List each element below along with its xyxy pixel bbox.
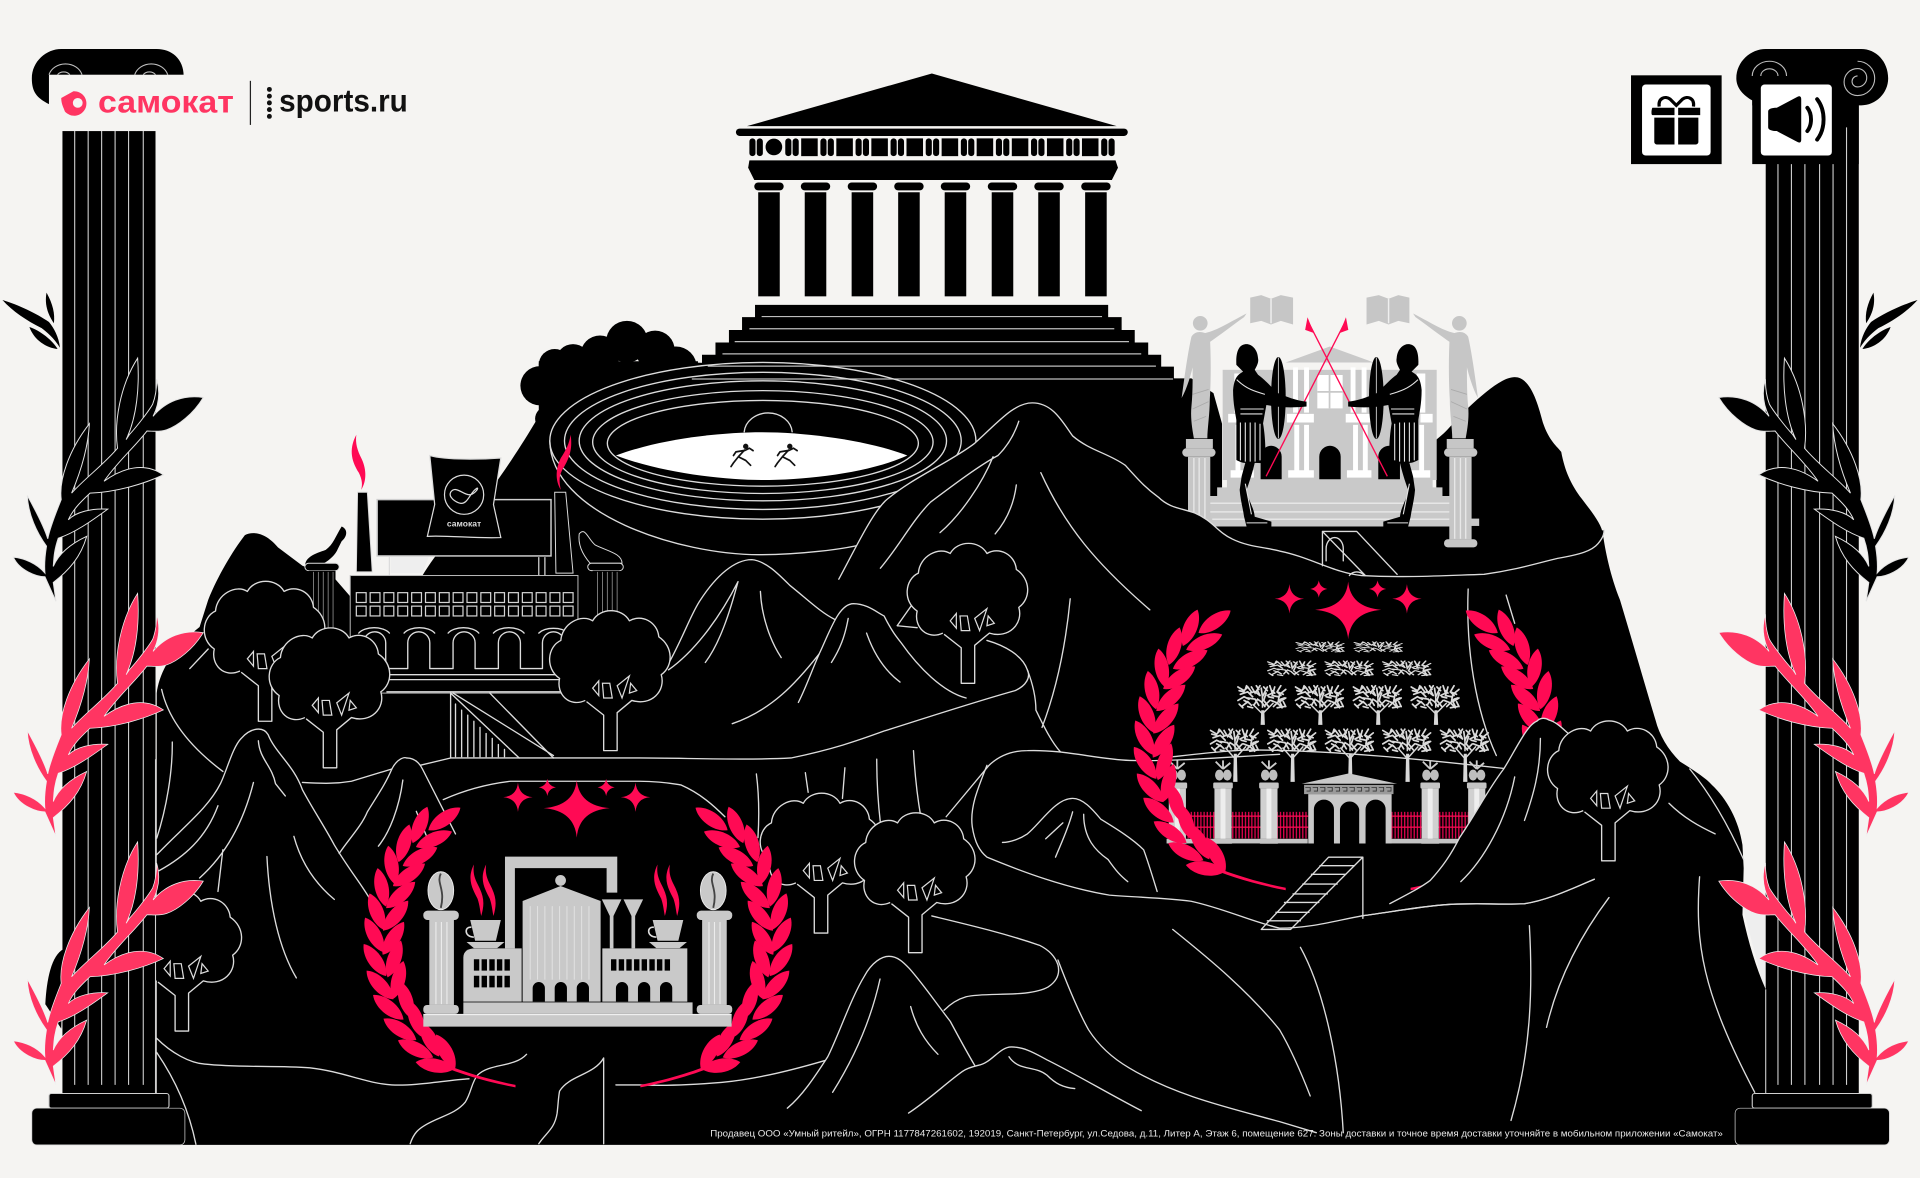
small stairs under warrior scene: [1322, 531, 1397, 576]
main hill silhouette: [157, 362, 1766, 1145]
hill lines: large peak: [880, 421, 1150, 610]
logo background: [49, 75, 429, 131]
mountain: right peak fill: [1390, 718, 1629, 904]
factory body: [350, 576, 578, 693]
tree right: [1548, 721, 1668, 861]
billboard legs: [389, 557, 545, 576]
temple pediment: [747, 73, 1117, 126]
laurel branch: right pink lower: [1719, 842, 1909, 1085]
column right: [1735, 49, 1889, 1145]
factory scene: [305, 435, 623, 758]
hill H inner lines: [1046, 812, 1128, 882]
building highlights: [530, 906, 589, 980]
runners: [731, 445, 797, 467]
warrior right: [1348, 344, 1422, 527]
small black sprig left: [2, 293, 60, 349]
laurel branch: right black: [1719, 358, 1909, 601]
logo: samokat: самокат: [98, 84, 234, 120]
mountain: large peak: [839, 403, 1604, 579]
mountain: lower right slope: [909, 1047, 1141, 1113]
mountain: small peak by wreath: [339, 758, 456, 853]
hill H with inner lines: [1002, 798, 1157, 891]
orchard rows: [1211, 642, 1488, 782]
wreath right: [1128, 605, 1568, 890]
stars right: [1275, 580, 1422, 639]
logo divider: [250, 81, 251, 125]
mountain: middle peak: [732, 604, 966, 724]
bottom path lines: [410, 1054, 825, 1144]
statue right: [1367, 295, 1478, 547]
wreath left: [358, 802, 798, 1087]
right ledge: [1471, 519, 1479, 526]
coffee steam: [470, 865, 496, 916]
columns with beans: [423, 911, 732, 1014]
stadium: [550, 362, 976, 555]
button: gift: [1631, 75, 1722, 164]
mountain: right peak outline: [1390, 718, 1570, 904]
small columns with leaves: [305, 527, 623, 632]
building windows: [474, 959, 670, 987]
platform: [423, 1015, 732, 1027]
orchard road: [1173, 750, 1503, 768]
left hill lines: [157, 649, 725, 1144]
warrior left: [1233, 344, 1307, 527]
central building: [463, 875, 687, 1002]
temple: [688, 73, 1174, 382]
road through the middle: [420, 640, 1029, 765]
trees: [121, 543, 1028, 1031]
capital left: [32, 49, 184, 104]
snack bag: [427, 456, 501, 538]
laurel branch: right pink upper: [1719, 593, 1909, 836]
mountain: left lower peak: [157, 729, 370, 899]
road right of lower peak: [932, 751, 1316, 1133]
laurel branch: left black: [13, 358, 203, 601]
goblets: [602, 899, 643, 948]
fence and gate: [1167, 760, 1487, 844]
black patch left of column: [45, 949, 64, 1029]
building: [1210, 347, 1450, 527]
factory windows: [356, 593, 573, 616]
factory arches and base: [359, 628, 578, 692]
chimneys: [356, 492, 372, 572]
laurel branch: left pink lower: [13, 842, 203, 1085]
column left: [32, 49, 185, 1145]
stadium field: [616, 432, 907, 480]
coffee factory: [423, 857, 732, 1027]
portico: [1302, 773, 1397, 784]
laurel branch: left pink upper: [13, 593, 203, 836]
road hill right: [972, 765, 1594, 928]
lower right line cluster: [756, 589, 1515, 1133]
capital right: [1736, 49, 1888, 105]
factory stairs: [451, 693, 553, 758]
light patch behind right hill: [1742, 900, 1776, 998]
footer legal text: Продавец ООО «Умный ритейл», ОГРН 1177847261602, 192019, Санкт-Петербург, ул.Седова, д.11, Литер А, Этаж 6, помещение 627. Зоны доставки и точное время доставки уточняйте в мобильном приложении «Самокат»: [710, 1128, 1723, 1139]
stars left: [503, 779, 650, 838]
warrior scene: [1182, 295, 1479, 547]
building arches: [533, 982, 672, 1002]
lower lines: [833, 979, 1075, 1092]
mountain: small peak behind factory: [670, 560, 835, 661]
temple steps: [688, 305, 1174, 382]
button: sound: [1761, 85, 1832, 156]
road over right peak base: [1362, 879, 1594, 916]
statue left: [1182, 295, 1293, 547]
small black sprig right: [1860, 293, 1918, 349]
bushes behind the stadium: [520, 321, 698, 431]
mountain inner lines: [669, 582, 917, 702]
billboard: [377, 500, 551, 556]
smoke: [352, 435, 365, 490]
mountain: lower centre peak: [787, 956, 975, 1108]
crossed spears: [1266, 320, 1387, 476]
pipe: [505, 857, 617, 948]
light patch under billboard: [391, 557, 429, 573]
stairs lower right: [1261, 857, 1363, 929]
right peak inner lines: [1461, 738, 1755, 1120]
logo: sports.ru: sports.ru: [279, 82, 408, 118]
coffee cups: [466, 920, 504, 948]
snack bag: самокат: [447, 519, 481, 529]
